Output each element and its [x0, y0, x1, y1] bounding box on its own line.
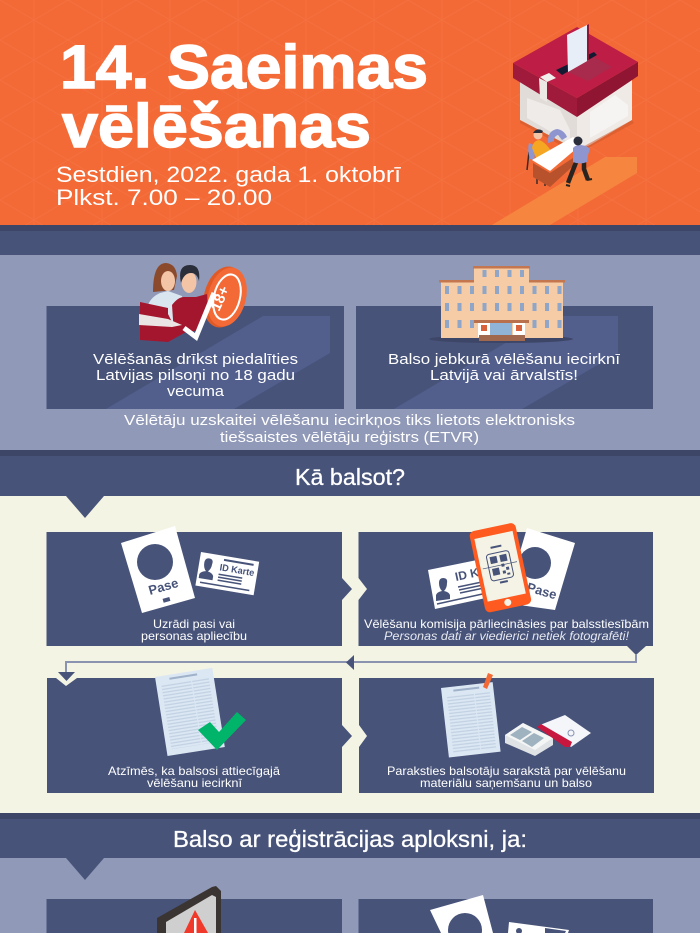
text [364, 617, 649, 643]
text: electronic register note: tiešsaistes vēlētāju reģistrs (ETVR) [220, 430, 479, 446]
text: Personas dati ar viedierici netiek fotografēti! [384, 629, 630, 643]
icon: passport behind phone: Pase [525, 579, 559, 602]
icon: ID card behind phone [428, 559, 495, 609]
icon: envelope [537, 715, 591, 747]
icon: passport [121, 526, 195, 613]
icon: signed voter list [441, 682, 501, 758]
icon: ID card: ID Karte [219, 562, 255, 579]
header background [0, 0, 700, 225]
heading band: how to vote: Kā balsot? [295, 464, 405, 490]
title: vēlēšanas [62, 92, 371, 160]
heading band: registration envelope [0, 813, 700, 880]
text [387, 764, 626, 790]
card: system warning [46, 886, 342, 933]
icon: polling station building [429, 266, 573, 343]
icon: citizens with flag and 18+ badge: 18+ [207, 283, 233, 314]
text [141, 617, 247, 643]
text: personas apliecību [141, 629, 247, 643]
card: age requirement [46, 306, 344, 409]
text: Atzīmēs, ka balsosi attiecīgajā [108, 764, 280, 778]
icon: tablet with warning sign [157, 886, 221, 933]
icon: voter list document [155, 668, 225, 756]
icon: passport: Pase [147, 575, 180, 598]
panel: how to vote background [0, 496, 700, 813]
text [108, 764, 280, 790]
text: materiālu saņemšanu un balso [420, 776, 592, 790]
date and time [56, 162, 402, 210]
icon: pencil [483, 673, 493, 689]
text: electronic register note: Vēlētāju uzskaitei vēlēšanu iecirkņos tiks lietots elektronisks [124, 413, 575, 429]
icon: ID card behind phone: ID K [454, 565, 480, 584]
text: electronic register note [124, 413, 575, 446]
text: age requirement: vecuma [167, 384, 225, 400]
icon: ballot box with polling table [513, 24, 638, 187]
text: age requirement: Latvijas pilsoņi no 18 gadu [96, 368, 295, 384]
step 4: sign and vote [359, 673, 654, 793]
text: age requirement [93, 352, 298, 400]
text: Vēlēšanu komisija pārliecināsies par balsstiesībām [364, 617, 649, 631]
date and time: Sestdien, 2022. gada 1. oktobrī [56, 162, 402, 187]
icon: green check mark [198, 712, 246, 750]
icon: passport [430, 895, 493, 933]
arrow: connector from step 2 to step 3 [66, 654, 636, 673]
heading band: how to vote [0, 450, 700, 518]
panel: registration envelope section background [0, 858, 700, 933]
text: any polling station: Latvijā vai ārvalstīs! [430, 368, 578, 384]
title [60, 33, 428, 160]
icon: ID card [195, 552, 259, 595]
heading band: registration envelope: Balso ar reģistrācijas aploksni, ja: [173, 826, 527, 852]
step 2: commission verifies [358, 522, 653, 655]
step 1: show passport or ID [46, 526, 352, 646]
card: any polling station [356, 306, 653, 409]
icon: phone with QR code [469, 522, 532, 613]
text: any polling station [388, 352, 620, 384]
text: age requirement: Vēlēšanās drīkst piedalīties [93, 352, 298, 368]
text: Paraksties balsotāju sarakstā par vēlēšanu [387, 764, 626, 778]
text: Uzrādi pasi vai [153, 617, 235, 631]
icon: ballot paper stack [505, 723, 553, 756]
text: any polling station: Balso jebkurā vēlēšanu iecirknī [388, 352, 620, 368]
icon: ID card [508, 922, 569, 933]
icon: citizens with flag and 18+ badge [139, 262, 253, 342]
step 3: marked in polling station [47, 668, 352, 793]
title: 14. Saeimas [60, 33, 428, 101]
panel: eligibility section [0, 255, 700, 450]
icon: passport behind phone [505, 528, 575, 610]
band: dark header strip [0, 225, 700, 255]
card: documents [358, 895, 653, 933]
date and time: Plkst. 7.00 – 20.00 [56, 185, 272, 210]
text: vēlēšanu iecirknī [147, 776, 243, 790]
